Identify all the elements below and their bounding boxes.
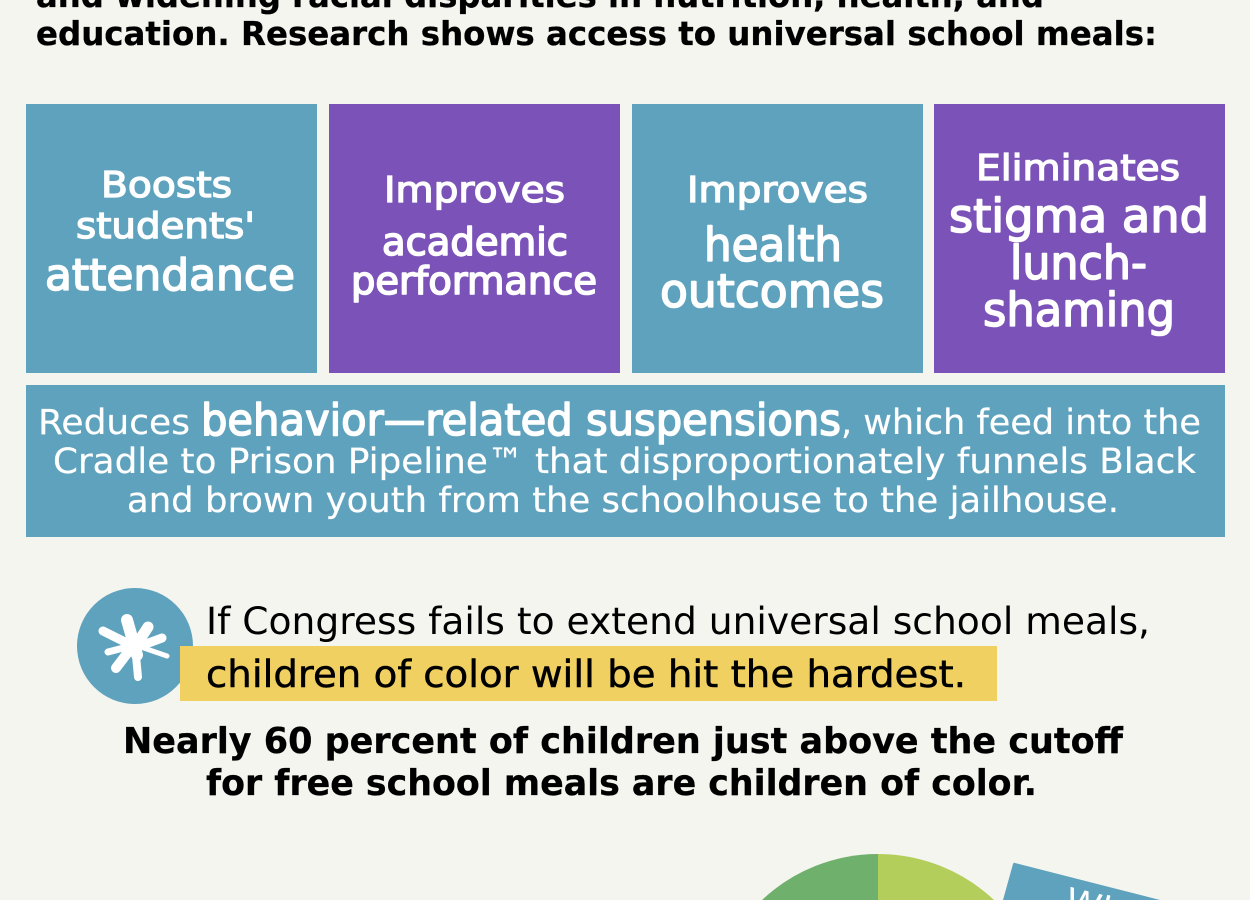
panel: academic performance: academic bbox=[382, 220, 568, 264]
callout: congress warning: children of color will be hit the hardest. bbox=[206, 653, 966, 696]
intro text bbox=[37, 0, 1154, 46]
panel: attendance: Boosts bbox=[101, 165, 232, 206]
panel: stigma: Eliminates bbox=[976, 148, 1180, 189]
panel: stigma: shaming bbox=[983, 283, 1175, 337]
panel: suspensions: behavior—related suspensions bbox=[201, 395, 841, 446]
panel: attendance: attendance bbox=[45, 250, 295, 301]
pie chart bbox=[762, 854, 994, 900]
panel: academic performance bbox=[329, 104, 620, 373]
panel: attendance: students' bbox=[76, 206, 255, 247]
panel: health outcomes bbox=[632, 104, 923, 373]
statistic statement: Nearly 60 percent of children just above the cutoff bbox=[123, 721, 1124, 762]
panel: health outcomes: outcomes bbox=[660, 264, 884, 318]
icon: asterisk badge bbox=[77, 588, 193, 704]
intro text: education. Research shows access to universal school meals: bbox=[36, 14, 1157, 53]
panel: suspensions bbox=[26, 385, 1225, 537]
panel: stigma: stigma and bbox=[949, 189, 1209, 243]
panel: attendance bbox=[26, 104, 317, 373]
panel: suspensions: Reduces bbox=[38, 403, 190, 443]
callout: congress warning bbox=[180, 600, 1150, 701]
panel: stigma bbox=[934, 104, 1225, 373]
panel: health outcomes: Improves bbox=[687, 170, 868, 211]
panel: health outcomes: health bbox=[704, 218, 842, 272]
panel: suspensions: Cradle to Prison Pipeline™ that disproportionately funnels Black bbox=[53, 442, 1197, 482]
statistic statement bbox=[123, 721, 1124, 804]
panel: stigma: lunch- bbox=[1010, 236, 1147, 290]
pie label tag bbox=[1003, 863, 1172, 900]
panel: suspensions: and brown youth from the schoolhouse to the jailhouse. bbox=[127, 481, 1119, 521]
panel: academic performance: Improves bbox=[384, 170, 565, 211]
statistic statement: for free school meals are children of color. bbox=[206, 763, 1037, 804]
callout: congress warning: If Congress fails to extend universal school meals, bbox=[206, 600, 1150, 643]
panel: academic performance: performance bbox=[351, 259, 597, 303]
panel: suspensions: , which feed into the bbox=[841, 403, 1201, 443]
